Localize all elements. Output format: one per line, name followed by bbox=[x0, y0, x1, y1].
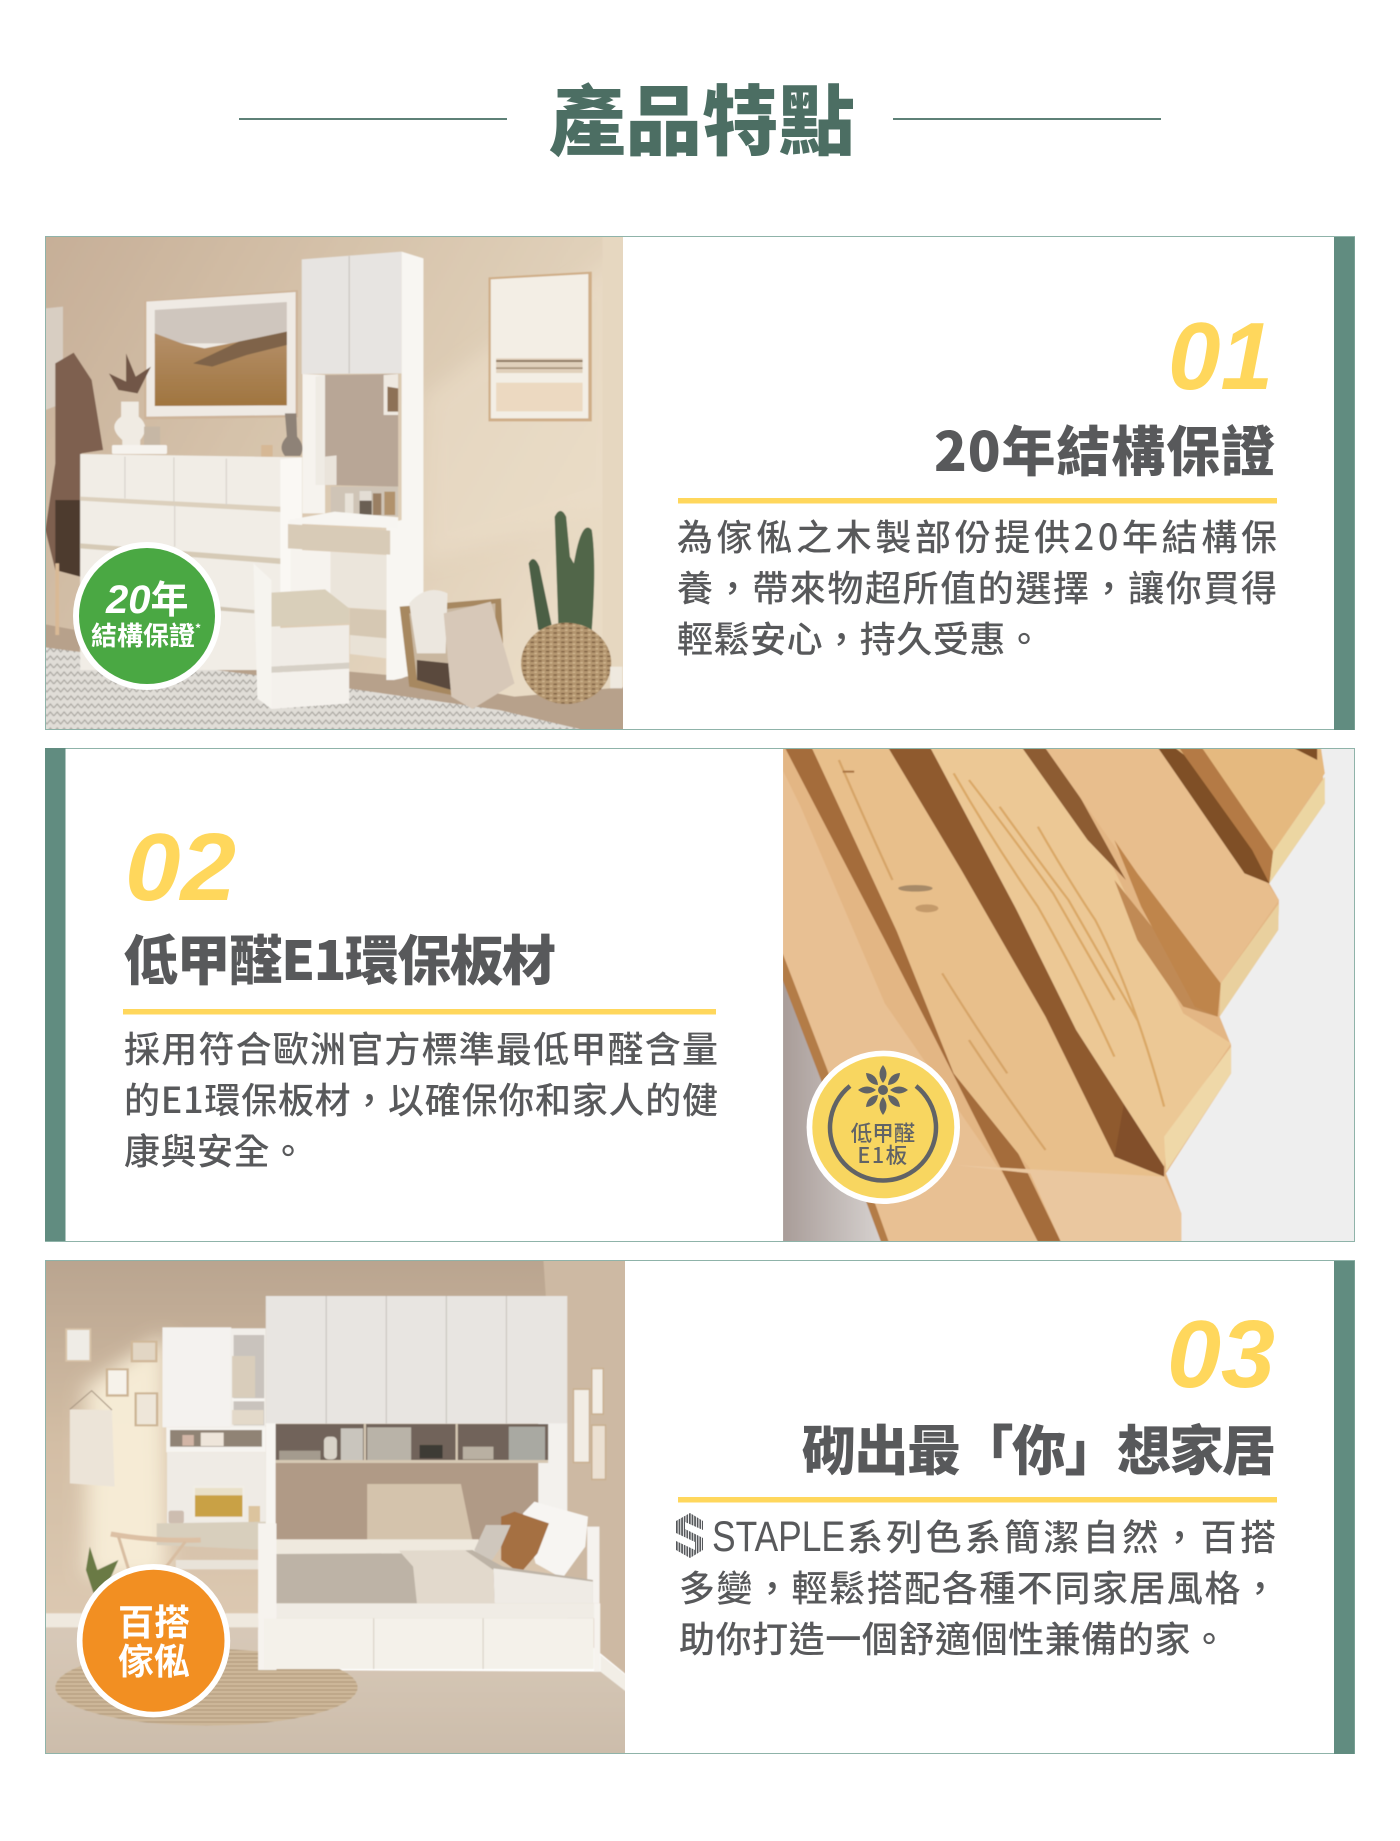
heading 01: 20年結構保證 bbox=[934, 408, 1275, 487]
macrame bbox=[70, 1409, 115, 1487]
headboard and bed bbox=[587, 1527, 599, 1603]
board 1 dark edge bbox=[785, 748, 1061, 1242]
board silhouette bbox=[783, 748, 1325, 1242]
right column bbox=[538, 1423, 567, 1523]
body text 03 bbox=[676, 1509, 1278, 1663]
rule 02 bbox=[123, 1009, 716, 1014]
dresser bbox=[80, 454, 302, 670]
basket and blanket bbox=[400, 598, 503, 695]
badge: versatile furniture: 傢俬 bbox=[118, 1633, 190, 1685]
body text 03: 多變，輕鬆搭配各種不同家居風格， bbox=[679, 1560, 1278, 1612]
board 2 shadow bbox=[888, 749, 1124, 1157]
rule 01 bbox=[678, 498, 1277, 504]
badge: 20-year warranty: 結構保證 bbox=[91, 616, 195, 653]
badge: 20-year warranty bbox=[73, 542, 221, 690]
right painting bbox=[488, 272, 592, 421]
number 02: 02 bbox=[125, 814, 236, 921]
icon: ring bbox=[830, 1086, 936, 1180]
body text 02 bbox=[124, 1021, 718, 1175]
number 01: 01 bbox=[1168, 303, 1273, 410]
body text 01: 養，帶來物超所值的選擇，讓你買得 bbox=[677, 560, 1277, 612]
body text 03: 系列色系簡潔自然，百搭 bbox=[847, 1509, 1276, 1561]
board 2 face bbox=[812, 748, 1164, 1177]
accent bar 03 bbox=[1334, 1261, 1354, 1754]
body text 01: 為傢俬之木製部份提供20年結構保 bbox=[677, 509, 1277, 561]
body text 01: 輕鬆安心，持久受惠。 bbox=[677, 611, 1042, 663]
accent bar 02 bbox=[45, 748, 66, 1241]
overhead cabinet bbox=[266, 1296, 567, 1424]
accent bar 01 bbox=[1334, 237, 1354, 730]
left painting bbox=[144, 290, 298, 419]
badge: versatile furniture bbox=[77, 1564, 230, 1717]
board 5 face bbox=[1176, 749, 1326, 776]
rug bbox=[46, 647, 580, 729]
knots bbox=[898, 885, 933, 892]
plant pot with cactus bbox=[555, 511, 594, 630]
bed base bbox=[258, 1603, 599, 1618]
board 1 face bbox=[783, 770, 1049, 1242]
body text 01 bbox=[677, 509, 1277, 663]
board 4 shadow bbox=[1158, 748, 1271, 883]
number 03: 03 bbox=[1167, 1301, 1275, 1408]
badge: 20-year warranty: 20年 bbox=[105, 569, 189, 624]
board 4 face bbox=[1046, 748, 1279, 983]
body text 03: 助你打造一個舒適個性兼備的家。 bbox=[679, 1611, 1227, 1663]
body text 02: 康與安全。 bbox=[124, 1123, 306, 1175]
book shelf bbox=[276, 1424, 548, 1460]
left frame and coat bbox=[45, 307, 63, 410]
rule 03 bbox=[678, 1497, 1277, 1502]
badge: versatile furniture: 百搭 bbox=[118, 1594, 190, 1646]
tall cabinet bbox=[302, 252, 402, 374]
board 3 face bbox=[931, 748, 1231, 1167]
icon: flower bbox=[858, 1065, 908, 1115]
badge: low formaldehyde E1 board bbox=[807, 1051, 960, 1204]
floor bbox=[46, 1630, 625, 1753]
plant bbox=[86, 1547, 118, 1593]
mirror bbox=[325, 374, 398, 487]
photo: storage bed room bbox=[40, 1257, 637, 1763]
badge: 20-year warranty: * bbox=[195, 620, 201, 637]
desk wall unit bbox=[162, 1327, 231, 1427]
icon: STAPLE S logo bbox=[676, 1513, 703, 1558]
niche wall bbox=[276, 1463, 538, 1540]
heading 02: 低甲醛E1環保板材 bbox=[124, 917, 556, 996]
desk bbox=[157, 1522, 270, 1550]
badge: low formaldehyde E1 board: E1板 bbox=[857, 1139, 909, 1170]
panel: 01 20-year structural warranty bbox=[40, 230, 1354, 740]
wall frames bbox=[65, 1328, 606, 1480]
body text 03: STAPLE bbox=[712, 1513, 845, 1561]
body text 02: 的E1環保板材，以確保你和家人的健 bbox=[124, 1072, 718, 1124]
floor bbox=[46, 624, 623, 729]
photo: wood boards bbox=[783, 748, 1355, 1243]
vase and plant bbox=[109, 353, 151, 393]
photo: dressing table room bbox=[40, 230, 629, 740]
laptop bbox=[193, 1486, 244, 1520]
body text 02: 採用符合歐洲官方標準最低甲醛含量 bbox=[124, 1021, 718, 1073]
title: 產品特點 bbox=[549, 61, 855, 172]
panel: 03 build your own home bbox=[40, 1257, 1354, 1763]
badge: low formaldehyde E1 board: 低甲醛 bbox=[851, 1117, 915, 1148]
panel: 02 low formaldehyde E1 board bbox=[45, 748, 1355, 1243]
desk top and drawer bbox=[289, 512, 398, 528]
rug bbox=[55, 1649, 358, 1726]
cosmetics shelf bbox=[331, 487, 398, 517]
board 3 shadow bbox=[1023, 748, 1126, 880]
stool bbox=[254, 563, 272, 709]
heading 03: 砌出最「你」想家居 bbox=[802, 1407, 1276, 1486]
sunlit wall bbox=[86, 1333, 166, 1577]
